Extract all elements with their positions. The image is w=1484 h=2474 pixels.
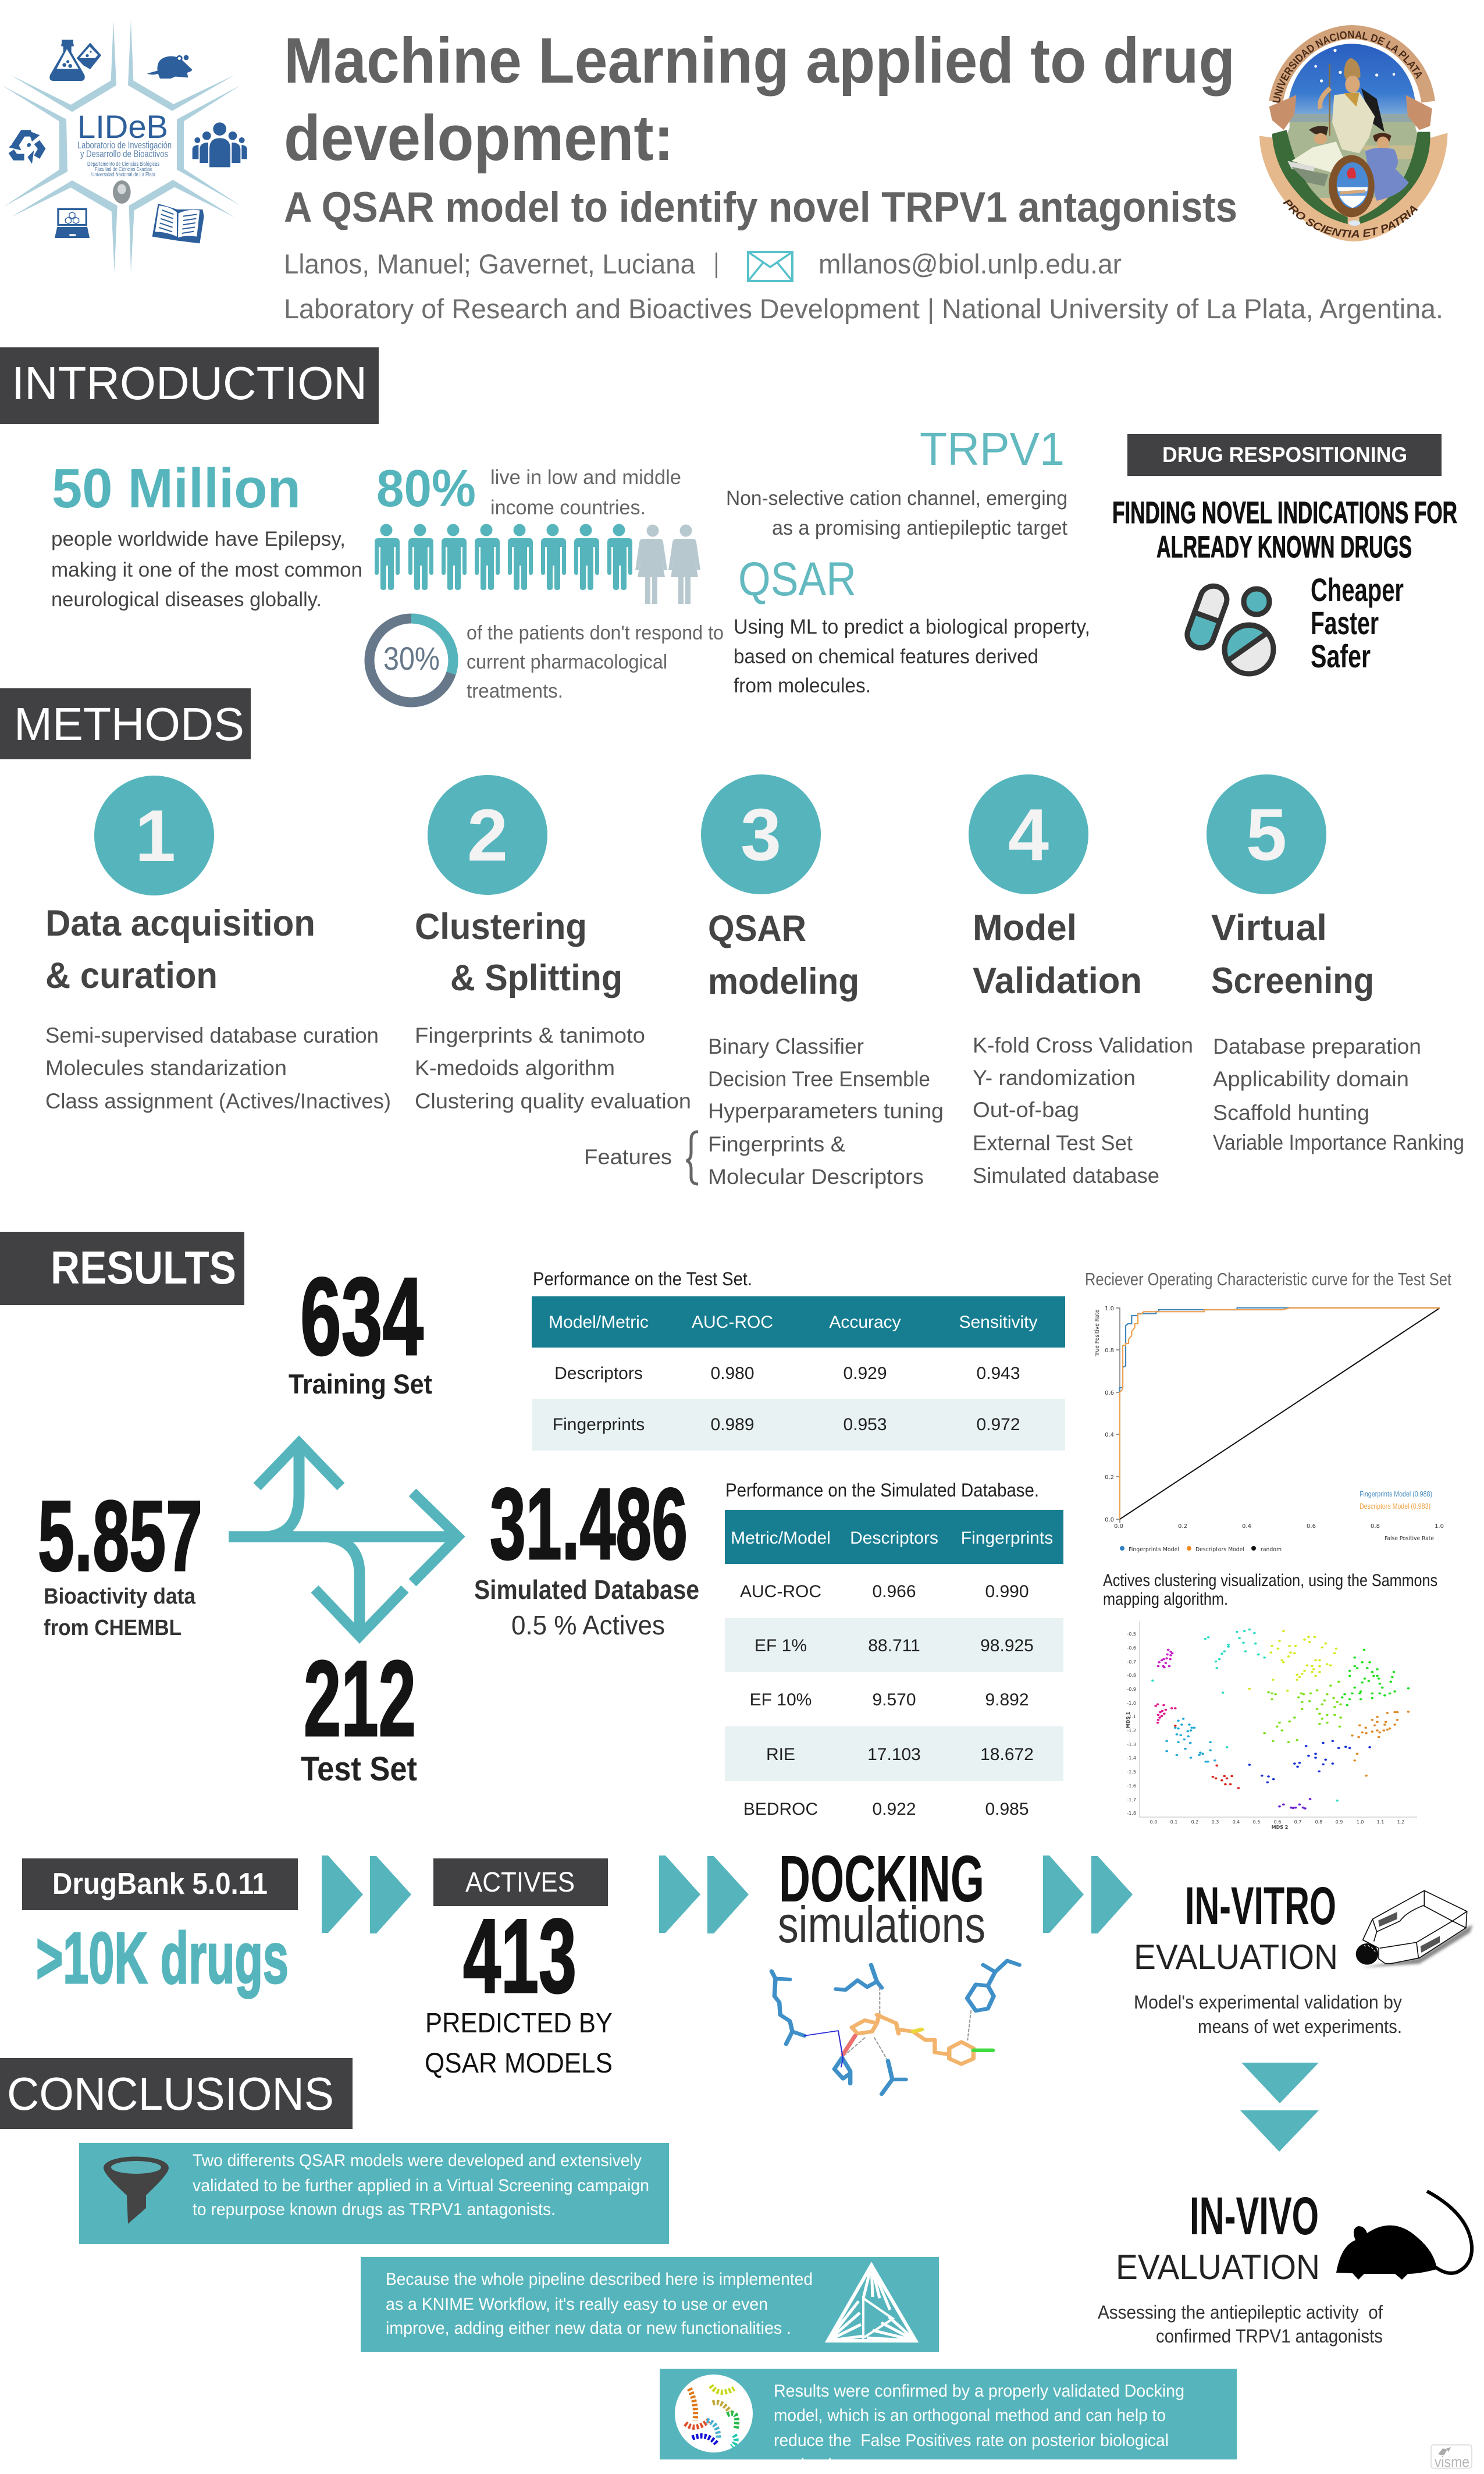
logo wordmark: Facultad de Ciencias Exactas (95, 166, 152, 173)
chart: clustering scatter: 1.1 (1377, 1819, 1384, 1825)
ROC axis labels: 0.8 (1105, 1348, 1114, 1354)
watermark: visme badge (1431, 2445, 1472, 2471)
table: performance on simulated database: 17.103 (867, 1745, 921, 1764)
caption: clustering: mapping algorithm. (1103, 1590, 1228, 1609)
chart: clustering scatter: 0.1 (1170, 1819, 1177, 1825)
chart: clustering scatter: 0.8 (1315, 1819, 1322, 1825)
conclusion 1: validated to be further applied in a Virtual Screening campaign (193, 2176, 649, 2195)
block: QSAR: QSAR (738, 553, 856, 606)
stat: 30 percent ring (369, 618, 453, 702)
method 4: 4 (1008, 794, 1049, 876)
ROC axis labels: 0.6 (1307, 1523, 1316, 1530)
method 2: 2 (467, 794, 508, 876)
university seal: PRO SCIENTIA ET PATRIA (1283, 199, 1418, 237)
chart: clustering scatter: 1.0 (1357, 1819, 1364, 1825)
stat: bioactivity data: 5.857 (38, 1480, 202, 1592)
stat: 50 million: making it one of the most common (51, 559, 362, 581)
chart: clustering scatter: -1.8 (1127, 1811, 1136, 1816)
ROC legends: Descriptors Model (1195, 1547, 1244, 1553)
heading: introduction (0, 347, 379, 424)
chart: clustering scatter: -0.5 (1127, 1631, 1136, 1637)
chart: clustering scatter: 0.9 (1336, 1819, 1343, 1825)
block: TRPV1: Non-selective cation channel, emerging (726, 487, 1067, 510)
stat: 50 million: neurological diseases globally. (51, 588, 322, 611)
university seal (1259, 25, 1447, 241)
heading: results: RESULTS (51, 1242, 236, 1293)
method 1: Molecules standarization (45, 1056, 287, 1080)
text: non-responders: of the patients don't respond to (467, 622, 724, 644)
table: performance on test set: Model/Metric (549, 1313, 649, 1332)
method 5: Scaffold hunting (1213, 1101, 1369, 1125)
stat: 30 percent ring: 30% (383, 640, 440, 677)
table: performance on test set: Fingerprints (553, 1415, 645, 1434)
method 3: Hyperparameters tuning (708, 1099, 944, 1123)
title: development: (284, 102, 674, 174)
table: performance on test set: 0.929 (843, 1364, 887, 1383)
panel: in-vivo evaluation (1098, 2187, 1472, 2347)
table: performance on simulated database: Performance on the Simulated Database. (725, 1480, 1039, 1501)
panel: docking: simulations (778, 1896, 985, 1953)
panel: drug repositioning: Safer (1311, 638, 1371, 674)
table: performance on simulated database: 9.570 (872, 1690, 916, 1709)
conclusion 2 (361, 2257, 939, 2352)
panel: in-vivo evaluation: Assessing the antiepileptic activity of (1098, 2302, 1383, 2323)
stat: test set: Test Set (301, 1750, 417, 1788)
stat: simulated database: Simulated Database (474, 1574, 699, 1605)
arrow: down triangles (1240, 2063, 1319, 2152)
chart: clustering scatter: -1.0 (1127, 1701, 1136, 1706)
table: performance on simulated database: 98.925 (980, 1636, 1034, 1655)
table: performance on test set: 0.972 (976, 1415, 1020, 1434)
table: performance on simulated database: AUC-ROC (740, 1582, 821, 1601)
logo wordmark (77, 108, 172, 178)
table: performance on simulated database: 0.990 (985, 1582, 1029, 1601)
chart: clustering scatter: -1.6 (1127, 1783, 1136, 1789)
conclusion 3: reduce the False Positives rate on posterior biological (774, 2431, 1169, 2450)
panel: in-vivo evaluation: EVALUATION (1116, 2248, 1320, 2287)
table: performance on test set: 0.943 (976, 1364, 1020, 1383)
chart: clustering scatter: -1.7 (1127, 1797, 1136, 1803)
panel: in-vitro evaluation: means of wet experiments. (1198, 2016, 1402, 2037)
icon: funnel (104, 2156, 169, 2224)
icon: mouse silhouette (1336, 2191, 1472, 2280)
method 5: Variable Importance Ranking (1213, 1131, 1464, 1154)
method 4: Out-of-bag (973, 1098, 1079, 1122)
panel: drugbank source (22, 1858, 298, 1999)
table: performance on test set: AUC-ROC (692, 1313, 773, 1332)
panel: in-vitro evaluation (1134, 1876, 1473, 2037)
method 3: modeling (708, 961, 859, 1002)
ROC axis labels: 0.0 (1114, 1523, 1123, 1530)
stat: test set (301, 1639, 417, 1788)
icon: flasks (49, 40, 101, 81)
authors and contact: Llanos, Manuel; Gavernet, Luciana (284, 248, 696, 279)
stat: 80 percent: 80% (376, 460, 476, 518)
method 1: Data acquisition (45, 903, 315, 944)
ROC axis labels: 1.0 (1105, 1306, 1114, 1312)
block: TRPV1: as a promising antiepileptic target (772, 517, 1067, 539)
panel: in-vitro evaluation: IN-VITRO (1185, 1876, 1336, 1936)
table: performance on simulated database: Metric/Model (731, 1529, 831, 1548)
conclusion 2: improve, adding either new data or new functionalities . (386, 2319, 791, 2338)
conclusion 3 (660, 2369, 1237, 2474)
method 4: Validation (973, 961, 1142, 1001)
table: performance on test set: 0.989 (710, 1415, 755, 1434)
stat: 80 percent (376, 460, 681, 519)
title (284, 25, 1235, 174)
method 1: & curation (45, 955, 218, 996)
chart: clustering scatter: 1.2 (1397, 1819, 1404, 1825)
stat: training set (289, 1255, 432, 1399)
method 4 (969, 774, 1193, 1188)
ROC legends (1120, 1490, 1432, 1553)
logo wordmark: Laboratorio de Investigación (77, 140, 172, 151)
table: performance on test set (532, 1268, 1065, 1451)
panel: drugbank source: >10K drugs (36, 1918, 289, 1999)
icon: pills (1184, 582, 1273, 674)
chart: clustering scatter: 0.3 (1212, 1819, 1219, 1825)
table: performance on simulated database: 18.672 (980, 1745, 1034, 1764)
chart: clustering scatter: -0.7 (1127, 1659, 1136, 1665)
table: performance on simulated database: EF 10% (750, 1690, 812, 1709)
method 2: K-medoids algorithm (415, 1056, 615, 1080)
stat: simulated database (474, 1467, 699, 1640)
panel: in-vivo evaluation: IN-VIVO (1190, 2187, 1319, 2246)
chart: ROC curve (1085, 1269, 1451, 1553)
table: performance on simulated database (725, 1480, 1063, 1819)
method 2: Clustering quality evaluation (415, 1089, 691, 1113)
block: TRPV1: TRPV1 (920, 423, 1065, 475)
heading: results (0, 1232, 244, 1305)
stat: 50 million (51, 457, 362, 611)
text: non-responders: current pharmacological (467, 651, 667, 673)
panel: drug repositioning: DRUG RESPOSITIONING (1162, 443, 1407, 467)
icon: KNIME triangle (828, 2265, 916, 2341)
affiliation: Laboratory of Research and Bioactives Development | National University of La Plata, Argentina. (284, 293, 1443, 324)
subtitle: A QSAR model to identify novel TRPV1 antagonists (284, 184, 1237, 231)
panel: actives: 413 (463, 1897, 576, 2015)
block: QSAR (734, 553, 1090, 697)
pictogram: eight in ten people (375, 524, 700, 604)
chart: clustering scatter: -1.1 (1127, 1714, 1136, 1719)
block: QSAR: from molecules. (734, 674, 871, 697)
caption: clustering (1103, 1571, 1437, 1609)
chart: clustering scatter: -0.6 (1127, 1645, 1136, 1651)
ROC legends: random (1261, 1547, 1282, 1553)
logo wordmark: LIDeB (77, 108, 168, 145)
icon: people (193, 122, 247, 167)
table: performance on simulated database: 88.711 (868, 1636, 920, 1655)
chart: clustering scatter: 0.0 (1150, 1819, 1157, 1825)
icon: laptop (55, 208, 90, 238)
method 4: K-fold Cross Validation (973, 1033, 1193, 1057)
method 3: Binary Classifier (708, 1035, 864, 1058)
arrow: chevrons three (1043, 1856, 1133, 1933)
title: Machine Learning applied to drug (284, 25, 1235, 97)
logo wordmark: y Desarrollo de Bioactivos (80, 148, 168, 159)
chart: clustering scatter: MDS 2 (1272, 1825, 1288, 1830)
conclusion 1 (79, 2143, 669, 2244)
chart: clustering scatter: 0.5 (1253, 1819, 1260, 1825)
panel: drug repositioning (1112, 434, 1457, 674)
panel: docking: DOCKING (779, 1842, 984, 1915)
ROC axis labels: 0.0 (1105, 1517, 1114, 1523)
stat: simulated database: 0.5 % Actives (511, 1610, 665, 1640)
chart: clustering scatter: -0.9 (1127, 1687, 1136, 1692)
icon: envelope (748, 252, 792, 281)
table: performance on test set: 0.980 (710, 1364, 755, 1383)
stat: training set: 634 (300, 1255, 424, 1378)
arrow: chevrons two (659, 1856, 749, 1933)
text: non-responders: treatments. (467, 680, 563, 702)
stat: bioactivity data: Bioactivity data (44, 1584, 196, 1609)
table: performance on simulated database: 0.985 (985, 1800, 1029, 1819)
authors and contact (284, 248, 1122, 281)
arrow: split into three sets (229, 1443, 460, 1636)
method 3: 3 (741, 794, 781, 876)
conclusion 1: Two differents QSAR models were developed and extensively (193, 2151, 642, 2170)
ROC axis labels: False Positive Rate (1385, 1535, 1434, 1542)
panel: drug repositioning: Faster (1311, 605, 1379, 641)
method 5: Applicability domain (1213, 1067, 1409, 1091)
icon: protein structure (675, 2375, 753, 2452)
text: non-responders (467, 622, 724, 702)
illustration: docked molecule (771, 1961, 1019, 2094)
chart: clustering scatter: 0.2 (1191, 1819, 1198, 1825)
university seal: UNIVERSIDAD NACIONAL DE LA PLATA (1273, 30, 1422, 102)
method 2: Clustering (415, 907, 587, 947)
chart: clustering scatter: 0.6 (1274, 1819, 1281, 1825)
method 3: QSAR (708, 908, 806, 949)
stat: test set: 212 (304, 1639, 416, 1759)
method 3 (584, 774, 944, 1189)
panel: in-vitro evaluation: EVALUATION (1134, 1938, 1338, 1977)
stat: training set: Training Set (289, 1368, 432, 1399)
ROC axis labels: 0.4 (1242, 1523, 1251, 1530)
ROC axis labels: 0.2 (1105, 1474, 1114, 1481)
logo wordmark: Departamento de Ciencias Biológicas (87, 161, 159, 168)
stat: bioactivity data (38, 1480, 202, 1640)
method 4: Y- randomization (973, 1066, 1136, 1090)
authors and contact: mllanos@biol.unlp.edu.ar (818, 248, 1122, 279)
ROC axis labels: 0.4 (1105, 1432, 1114, 1438)
panel: in-vitro evaluation: Model's experimental validation by (1134, 1992, 1402, 2013)
heading: methods (0, 688, 251, 759)
chart: clustering scatter (1126, 1622, 1417, 1830)
method 1 (45, 776, 391, 1113)
chart: clustering scatter: MDS 1 (1126, 1711, 1131, 1728)
method 1: Class assignment (Actives/Inactives) (45, 1089, 391, 1113)
method 2 (415, 775, 691, 1113)
icon: recycle (9, 130, 42, 164)
chart: clustering scatter: 0.4 (1233, 1819, 1240, 1825)
chart: clustering scatter: 0.7 (1294, 1819, 1301, 1825)
logo wordmark: Universidad Nacional de La Plata (91, 172, 155, 178)
ROC legends: Fingerprints Model (1129, 1547, 1179, 1553)
stat: bioactivity data: from CHEMBL (44, 1616, 182, 1640)
stat: simulated database: 31.486 (490, 1467, 688, 1580)
conclusion 2: as a KNIME Workflow, it's really easy to use or even (386, 2295, 768, 2314)
method 5: Database preparation (1213, 1035, 1421, 1058)
stat: 50 million: people worldwide have Epilepsy, (51, 528, 346, 550)
panel: actives: PREDICTED BY (425, 2008, 613, 2039)
panel: in-vivo evaluation: confirmed TRPV1 antagonists (1156, 2326, 1383, 2347)
method 5: Screening (1211, 961, 1374, 1001)
heading: methods: METHODS (14, 698, 244, 750)
method 1: 1 (135, 795, 176, 877)
conclusion 3: model, which is an orthogonal method and can help to (774, 2406, 1166, 2425)
table: performance on simulated database: 0.966 (872, 1582, 916, 1601)
ROC axis labels: 1.0 (1435, 1523, 1444, 1530)
table: performance on simulated database: BEDROC (743, 1800, 818, 1819)
panel: drugbank source: DrugBank 5.0.11 (52, 1867, 268, 1901)
table: performance on simulated database: 0.922 (872, 1800, 916, 1819)
ROC axis labels: 0.6 (1105, 1390, 1114, 1396)
table: performance on test set: 0.953 (843, 1415, 887, 1434)
icon: mouse (147, 55, 193, 79)
conclusion 1: to repurpose known drugs as TRPV1 antagonists. (193, 2200, 556, 2219)
table: performance on test set: Sensitivity (959, 1313, 1038, 1332)
panel: actives (425, 1858, 613, 2079)
chart: clustering scatter: -1.3 (1127, 1742, 1136, 1747)
table: performance on simulated database: Descriptors (850, 1529, 938, 1548)
watermark: visme badge: visme (1435, 2453, 1469, 2471)
method 2: & Splitting (450, 958, 622, 998)
table: performance on simulated database: EF 1% (755, 1636, 807, 1655)
panel: actives: QSAR MODELS (425, 2048, 613, 2079)
ROC legends: Fingerprints Model (0.988) (1360, 1490, 1432, 1498)
method 3: Molecular Descriptors (708, 1165, 924, 1189)
chart: clustering scatter: -1.4 (1127, 1755, 1136, 1761)
icon: open book (152, 204, 204, 243)
ROC axis labels: 0.2 (1178, 1523, 1187, 1530)
stat: 80 percent: live in low and middle (490, 466, 681, 489)
method 4: External Test Set (973, 1131, 1133, 1155)
ROC axis labels (1094, 1306, 1444, 1542)
icon: culture flask (1356, 1890, 1473, 1968)
chart: clustering scatter: -1.5 (1127, 1769, 1136, 1775)
method 4: Model (973, 908, 1077, 948)
table: performance on test set: Accuracy (829, 1313, 901, 1332)
heading: conclusions: CONCLUSIONS (7, 2068, 334, 2120)
conclusion 3: Results were confirmed by a properly validated Docking (774, 2381, 1184, 2401)
table: performance on simulated database: RIE (766, 1745, 795, 1764)
method 5: Virtual (1211, 908, 1327, 948)
table: performance on test set: Performance on the Test Set. (533, 1268, 752, 1289)
ROC axis labels: True Positive Rate (1094, 1309, 1101, 1357)
table: performance on test set: Descriptors (554, 1364, 643, 1383)
method 1: Semi-supervised database curation (45, 1023, 379, 1047)
chart: clustering scatter: -0.8 (1127, 1673, 1136, 1678)
panel: docking (771, 1842, 1019, 2094)
stat: 50 million: 50 Million (52, 457, 301, 520)
table: performance on simulated database: Fingerprints (961, 1529, 1053, 1548)
method 3: Decision Tree Ensemble (708, 1067, 930, 1091)
header logo: LIDeB (2, 20, 247, 272)
method 3: Fingerprints & (708, 1132, 845, 1156)
method 5 (1207, 774, 1464, 1154)
method 3: Features (584, 1145, 672, 1169)
method 5: 5 (1246, 794, 1287, 876)
block: TRPV1 (726, 423, 1067, 539)
arrow: chevrons one (322, 1856, 411, 1933)
block: QSAR: Using ML to predict a biological property, (734, 616, 1090, 638)
ROC axis labels: 0.8 (1371, 1523, 1380, 1530)
heading: introduction: INTRODUCTION (12, 357, 367, 409)
panel: actives: ACTIVES (465, 1867, 575, 1898)
chart: clustering scatter: -1.2 (1127, 1728, 1136, 1733)
ROC legends: Descriptors Model (0.983) (1360, 1502, 1430, 1510)
method 4: Simulated database (973, 1164, 1159, 1188)
table: performance on simulated database: 9.892 (985, 1690, 1029, 1709)
block: QSAR: based on chemical features derived (734, 645, 1038, 668)
panel: drug repositioning: Cheaper (1311, 571, 1404, 608)
method 2: Fingerprints & tanimoto (415, 1023, 645, 1047)
stat: 80 percent: income countries. (490, 496, 646, 519)
conclusion 2: Because the whole pipeline described here is implemented (386, 2270, 813, 2289)
